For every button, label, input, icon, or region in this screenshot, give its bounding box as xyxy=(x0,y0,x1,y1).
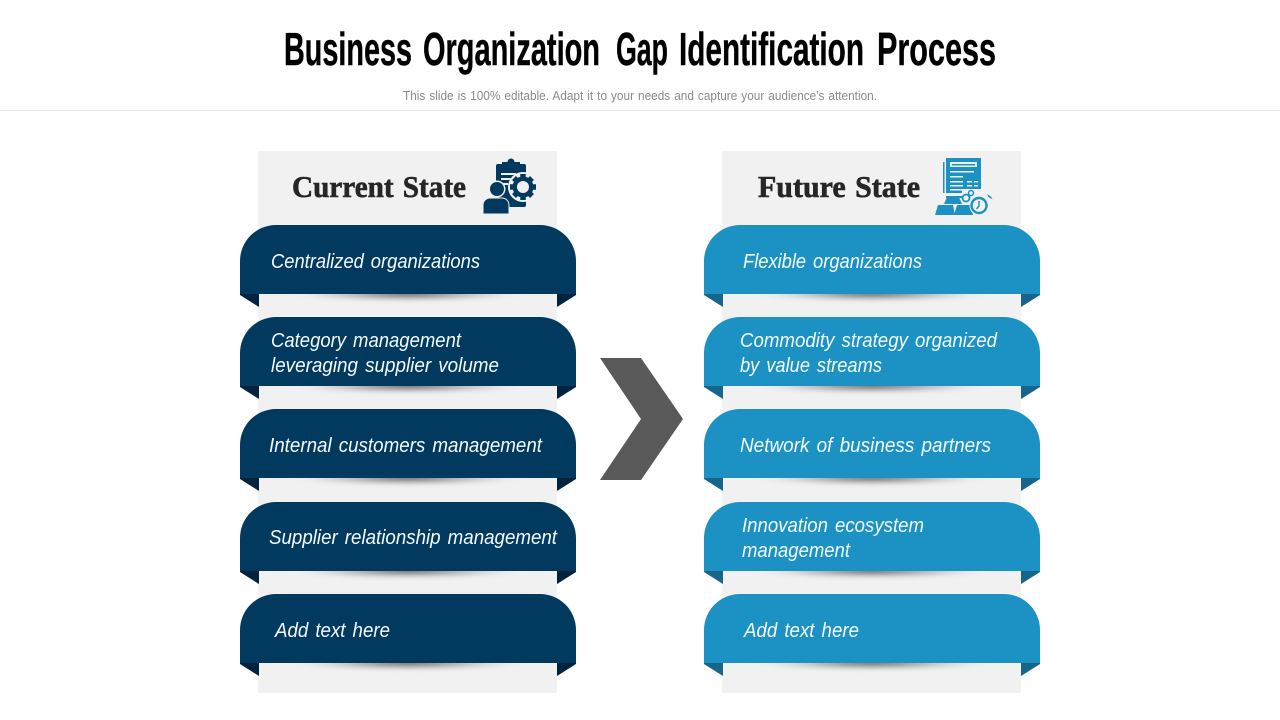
band: add text here (current) xyxy=(240,594,576,676)
band: supplier relationship management: Supplier relationship management xyxy=(269,527,558,549)
title: Gap xyxy=(616,23,668,75)
band: innovation ecosystem xyxy=(704,502,1040,584)
band: commodity strategy xyxy=(704,317,1040,399)
band: flexible organizations: Flexible organizations xyxy=(743,251,922,273)
band: network of business partners xyxy=(704,409,1040,491)
band: innovation ecosystem: management xyxy=(742,540,851,562)
band: flexible organizations xyxy=(704,225,1040,307)
title: Identification xyxy=(679,23,864,75)
title: Organization xyxy=(423,23,600,75)
band: centralized organizations xyxy=(240,225,576,307)
band: category management: leveraging supplier volume xyxy=(271,355,499,377)
title xyxy=(284,23,996,75)
arrow: current to future xyxy=(600,358,683,480)
icon: clipboard, person and gear xyxy=(483,159,538,214)
band: add text here (current): Add text here xyxy=(274,620,390,642)
band: category management xyxy=(240,317,576,399)
band: internal customers management: Internal customers management xyxy=(269,435,543,457)
band: innovation ecosystem: Innovation ecosystem xyxy=(742,515,924,537)
band: commodity strategy: by value streams xyxy=(740,355,882,377)
band: category management: Category management xyxy=(271,330,462,352)
icon: document, gold bars and stopwatch xyxy=(935,158,994,217)
heading: current state: Current State xyxy=(292,169,466,204)
band: centralized organizations: Centralized organizations xyxy=(271,251,480,273)
subtitle: This slide is 100% editable. Adapt it to your needs and capture your audience's attention. xyxy=(403,88,877,103)
band: add text here (future) xyxy=(704,594,1040,676)
title: Business xyxy=(284,23,412,75)
band: supplier relationship management xyxy=(240,502,576,584)
band: internal customers management xyxy=(240,409,576,491)
band: add text here (future): Add text here xyxy=(743,620,859,642)
title: Process xyxy=(877,23,996,75)
panel: current state xyxy=(258,151,557,693)
band: network of business partners: Network of business partners xyxy=(740,435,991,457)
panel: future state xyxy=(722,151,1021,693)
band: commodity strategy: Commodity strategy organized xyxy=(740,330,998,352)
heading: future state: Future State xyxy=(758,169,920,204)
